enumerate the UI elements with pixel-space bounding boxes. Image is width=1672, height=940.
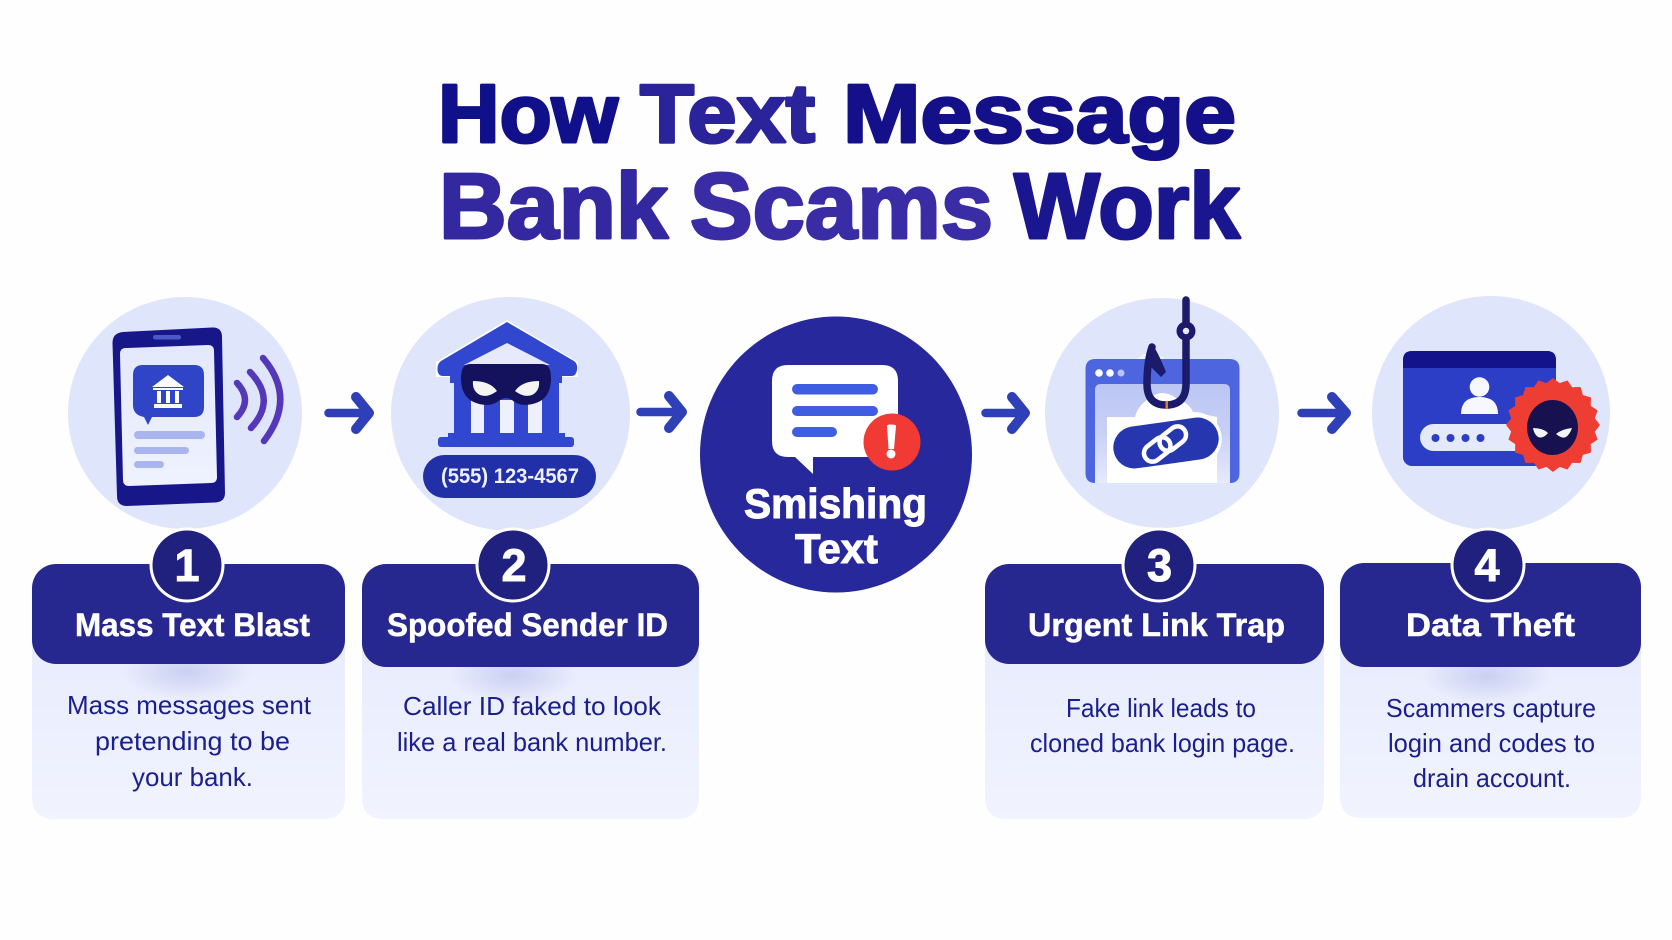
card 1: Mass Text Blast: Mass messages sent (67, 690, 312, 720)
card 1: Mass Text Blast: Mass Text Blast (75, 607, 310, 643)
title: Message (843, 67, 1236, 160)
number badge 4: 4 (1474, 540, 1500, 591)
card 3: Urgent Link Trap: Urgent Link Trap (1028, 607, 1285, 643)
title: How (438, 67, 618, 160)
card 4: Data Theft: Scammers capture (1386, 693, 1596, 723)
card 3: Urgent Link Trap (985, 528, 1324, 819)
step 4 icon: login window with hacker badge (1372, 296, 1610, 530)
step 3 icon: fish hook over link on browser window (1045, 298, 1279, 528)
number badge 4 (1450, 528, 1526, 602)
card 4: Data Theft: login and codes to (1388, 728, 1595, 758)
card 4: Data Theft (1340, 528, 1641, 818)
icon: message bubble with alert (772, 365, 920, 474)
arrow 3 (986, 397, 1025, 429)
card 4: Data Theft: drain account. (1413, 763, 1571, 793)
icon: hacker badge (1507, 379, 1599, 471)
number badge 3 (1122, 528, 1196, 602)
center circle: smishing text: Smishing (744, 480, 927, 527)
card 1: Mass Text Blast: your bank. (132, 762, 253, 792)
title: Text (640, 67, 815, 160)
step 2 icon: masked bank with spoofed number (391, 297, 630, 531)
card 2: Spoofed Sender ID: Caller ID faked to look (403, 691, 662, 721)
card 4: Data Theft: Data Theft (1406, 607, 1575, 643)
number badge 1: 1 (174, 540, 200, 591)
icon: chain link (1141, 422, 1189, 466)
title: Work (1014, 154, 1240, 258)
number badge 3: 3 (1147, 540, 1172, 591)
arrow 2 (640, 396, 682, 428)
number badge 2: 2 (501, 540, 527, 591)
card 1: Mass Text Blast (32, 528, 345, 819)
arrow 4 (1302, 397, 1346, 429)
card 2: Spoofed Sender ID (362, 528, 699, 819)
card 1: Mass Text Blast: pretending to be (95, 726, 290, 756)
card 2: Spoofed Sender ID: Spoofed Sender ID (387, 607, 668, 643)
card 3: Urgent Link Trap: cloned bank login page. (1030, 728, 1295, 758)
number badge 1 (150, 528, 224, 602)
card 2: Spoofed Sender ID: like a real bank number. (397, 727, 667, 757)
number badge 2 (476, 528, 550, 602)
step 2 icon: masked bank with spoofed number: (555) 123-4567 (441, 465, 579, 488)
icon: fish hook (1147, 300, 1196, 409)
arrow 1 (328, 397, 369, 429)
title (438, 67, 1240, 258)
step 1 icon: phone with bank message and signal waves (68, 297, 302, 529)
title: Scams (690, 154, 993, 258)
center circle: smishing text (700, 316, 972, 592)
card 3: Urgent Link Trap: Fake link leads to (1066, 693, 1256, 723)
center circle: smishing text: Text (795, 525, 878, 572)
title: Bank (439, 154, 668, 258)
